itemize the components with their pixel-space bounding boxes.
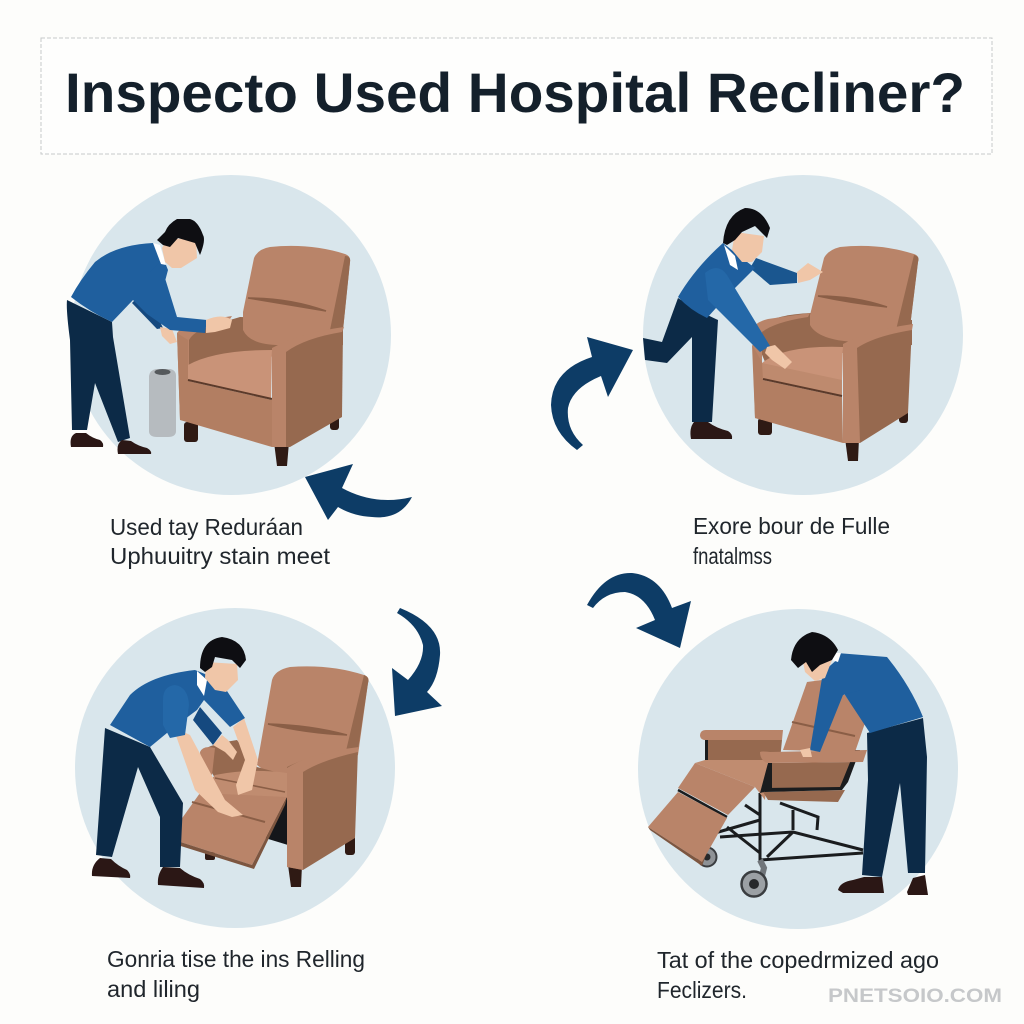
caption: step 3: and liling [107, 976, 200, 1002]
caption: step 1: Uphuuitry stain meet [110, 543, 330, 569]
small wheel [698, 848, 716, 866]
icon: cylinder [149, 369, 176, 437]
caption: step 4 [657, 947, 939, 1003]
caption: step 4: Tat of the copedrmized ago [657, 947, 939, 973]
arrow: step 3 [392, 608, 442, 716]
arrow: step 2 [551, 337, 633, 450]
panel: frame check [643, 175, 963, 495]
caption: step 2: Exore bour de Fulle [693, 513, 890, 539]
recliner chair [752, 246, 918, 461]
large wheel [742, 860, 766, 896]
person inspecting [92, 637, 258, 888]
caption: step 3 [107, 946, 365, 1002]
panel: footrest check [75, 608, 395, 928]
recliner chair [168, 666, 368, 887]
caption: step 1 [110, 514, 330, 569]
panel: upholstery check [67, 175, 391, 495]
circle background [638, 609, 958, 929]
circle background [643, 175, 963, 495]
circle background [71, 175, 391, 495]
recliner chair [648, 680, 867, 866]
watermark: PNETSOIO.COM [828, 986, 1002, 1007]
wheeled frame [698, 793, 863, 896]
caption: step 2: fnatalmss [693, 543, 772, 569]
circle background [75, 608, 395, 928]
person inspecting [791, 632, 928, 895]
recliner chair [177, 246, 350, 466]
caption: step 2 [693, 513, 890, 569]
person inspecting [643, 208, 823, 439]
caption: step 1: Used tay Reduráan [110, 514, 303, 540]
panel: wheeled base check [638, 609, 958, 929]
caption: step 4: Feclizers. [657, 977, 747, 1003]
caption: step 3: Gonria tise the ins Relling [107, 946, 365, 972]
person inspecting [67, 219, 232, 454]
arrow: step 1 [305, 464, 412, 520]
arrow: step 4 [587, 573, 691, 648]
title: Inspecto Used Hospital Recliner? [65, 61, 965, 124]
title [41, 38, 992, 154]
